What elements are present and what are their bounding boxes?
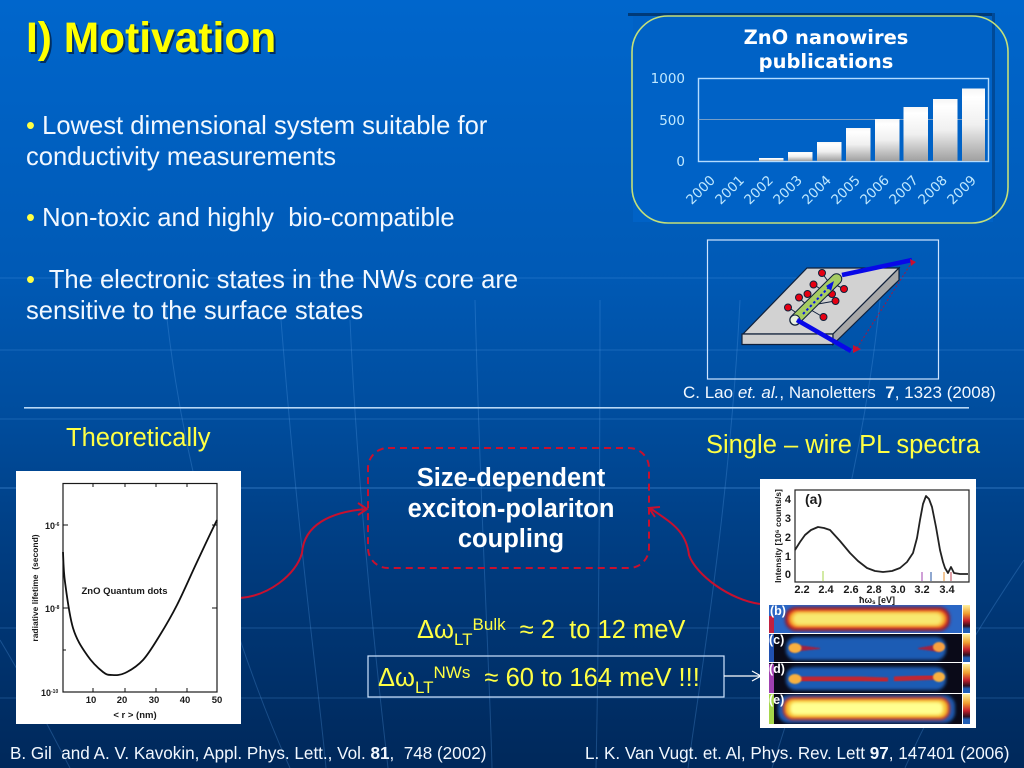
spectrum plot: 3.2 [914,584,930,596]
x axis labels: 2008 [915,173,951,208]
map e [769,694,962,724]
spectrum plot: ħω [859,595,872,605]
bullet list: • Lowest dimensional system suitable for [26,112,488,140]
figure: radiative lifetime: 10 [45,604,55,614]
spectrum plot: [eV] [875,595,895,605]
bullet list: conductivity measurements [26,143,336,171]
figure: radiative lifetime: 50 [212,695,222,706]
panel letters: (e) [769,693,784,707]
bulk splitting: ≈ 2 to 12 meV [506,616,685,644]
ticks [63,483,217,692]
figure: radiative lifetime: 10 [45,521,55,531]
chart title: ZnO nanowires [744,26,908,49]
spectrum plot: (a) [805,491,822,507]
spectrum plot: 3.0 [890,584,906,596]
title: I) Motivation [28,17,278,64]
panel letters: (d) [769,662,785,676]
bullet list: • Non-toxic and highly bio-compatible [26,204,455,232]
bullet list: sensitive to the surface states [26,297,363,325]
x axis labels: 2009 [944,173,980,208]
plot frame [698,78,988,162]
callout: coupling: exciton-polariton [408,495,614,523]
bullet list: • The electronic states in the NWs core are [26,266,518,294]
chart title [744,26,908,73]
figure: radiative lifetime: 10 [41,688,51,698]
spectrum plot: 2.4 [818,584,835,596]
x axis labels: 2001 [712,173,748,208]
x axis labels: 2003 [770,173,806,208]
figure: radiative lifetime [16,471,241,724]
bulk splitting: Bulk [473,615,506,634]
chart title: publications [759,50,893,73]
map b [769,605,962,633]
y axis labels [651,71,685,170]
heading: theoretically: Theoretically [66,424,211,452]
callout: coupling: coupling [458,525,564,553]
voltage line [853,259,916,353]
figure: radiative lifetime: ZnO Quantum dots [81,586,168,597]
spectrum plot: 3 [785,513,791,525]
spectrum plot: 2.2 [794,584,810,596]
spectrum plot: 4 [785,494,792,506]
divider [24,407,969,409]
spectrum plot: 1 [785,551,791,563]
y axis labels: 1000 [651,71,685,87]
figure: radiative lifetime: -6 [55,522,60,528]
spectrum plot: 0 [785,569,791,581]
x axis labels: 2002 [741,173,777,208]
spectrum plot: 2 [785,532,791,544]
y axis labels: 500 [659,113,685,129]
figure: radiative lifetime: 20 [117,695,127,706]
panel letters: (b) [770,604,786,618]
spectrum plot: 2.8 [866,584,882,596]
nanowire device diagram [708,240,938,379]
white arrow [724,671,761,681]
map d [769,663,962,693]
surface molecules [784,270,848,320]
callout: coupling [368,448,649,568]
spectrum plot: 3.4 [939,584,956,596]
x axis labels: 2006 [857,173,893,208]
bullet list [26,112,518,325]
bulk splitting: Δω [417,616,454,644]
heading: single-wire: Single – wire PL spectra [706,431,981,459]
lifetime curve [63,520,217,675]
figure: radiative lifetime: -8 [55,605,60,611]
spectrum plot: 2.6 [843,584,859,596]
spectrum plot [773,489,969,606]
panel: publications chart [628,13,1008,223]
nanowire splitting box: ≈ 60 to 164 meV !!! [470,664,700,692]
figure: radiative lifetime: -10 [51,689,58,695]
panel letters: (c) [769,633,784,647]
color bars and wavelength markers [769,605,970,724]
nanowire splitting box [368,656,724,697]
figure: radiative lifetime: 10 [86,695,96,706]
panel letters [769,604,786,707]
callout: coupling: Size-dependent [417,464,606,492]
nanowire splitting box: LT [415,678,434,697]
substrate [742,268,899,344]
spectrum plot: s [872,600,876,606]
nanowire [790,279,836,325]
y axis labels: 0 [676,154,685,170]
bulk splitting: LT [454,630,473,649]
x axis labels [683,173,980,208]
red connector left [240,503,367,598]
bars [759,88,985,161]
x axis labels: 2004 [799,173,835,208]
contacts [797,260,912,351]
citation: Gil: B. Gil and A. V. Kavokin, Appl. Phys. Lett., Vol. 81, 748 (2002) [10,744,486,763]
figure: radiative lifetime: 30 [149,695,159,706]
spectrum plot: Intensity [10⁶ counts/s] [773,489,783,583]
title: I) Motivation [26,15,276,62]
map c [769,634,962,662]
figure: radiative lifetime: radiative lifetime (second) [30,534,40,642]
nanowire splitting box: Δω [378,664,415,692]
x axis labels: 2005 [828,173,864,208]
figure: PL spectra and maps [760,479,976,728]
figure: radiative lifetime: 40 [180,695,190,706]
red connector right [649,507,760,604]
citation: Van Vugt: L. K. Van Vugt. et. Al, Phys. Rev. Lett 97, 147401 (2006) [585,744,1009,763]
nanowire splitting box: NWs [434,663,470,682]
figure: radiative lifetime: < r > (nm) [113,710,157,721]
x axis labels: 2000 [683,173,719,208]
citation: Lao: C. Lao et. al., Nanoletters 7, 1323 (2008) [683,383,996,402]
x axis labels: 2007 [886,173,922,208]
